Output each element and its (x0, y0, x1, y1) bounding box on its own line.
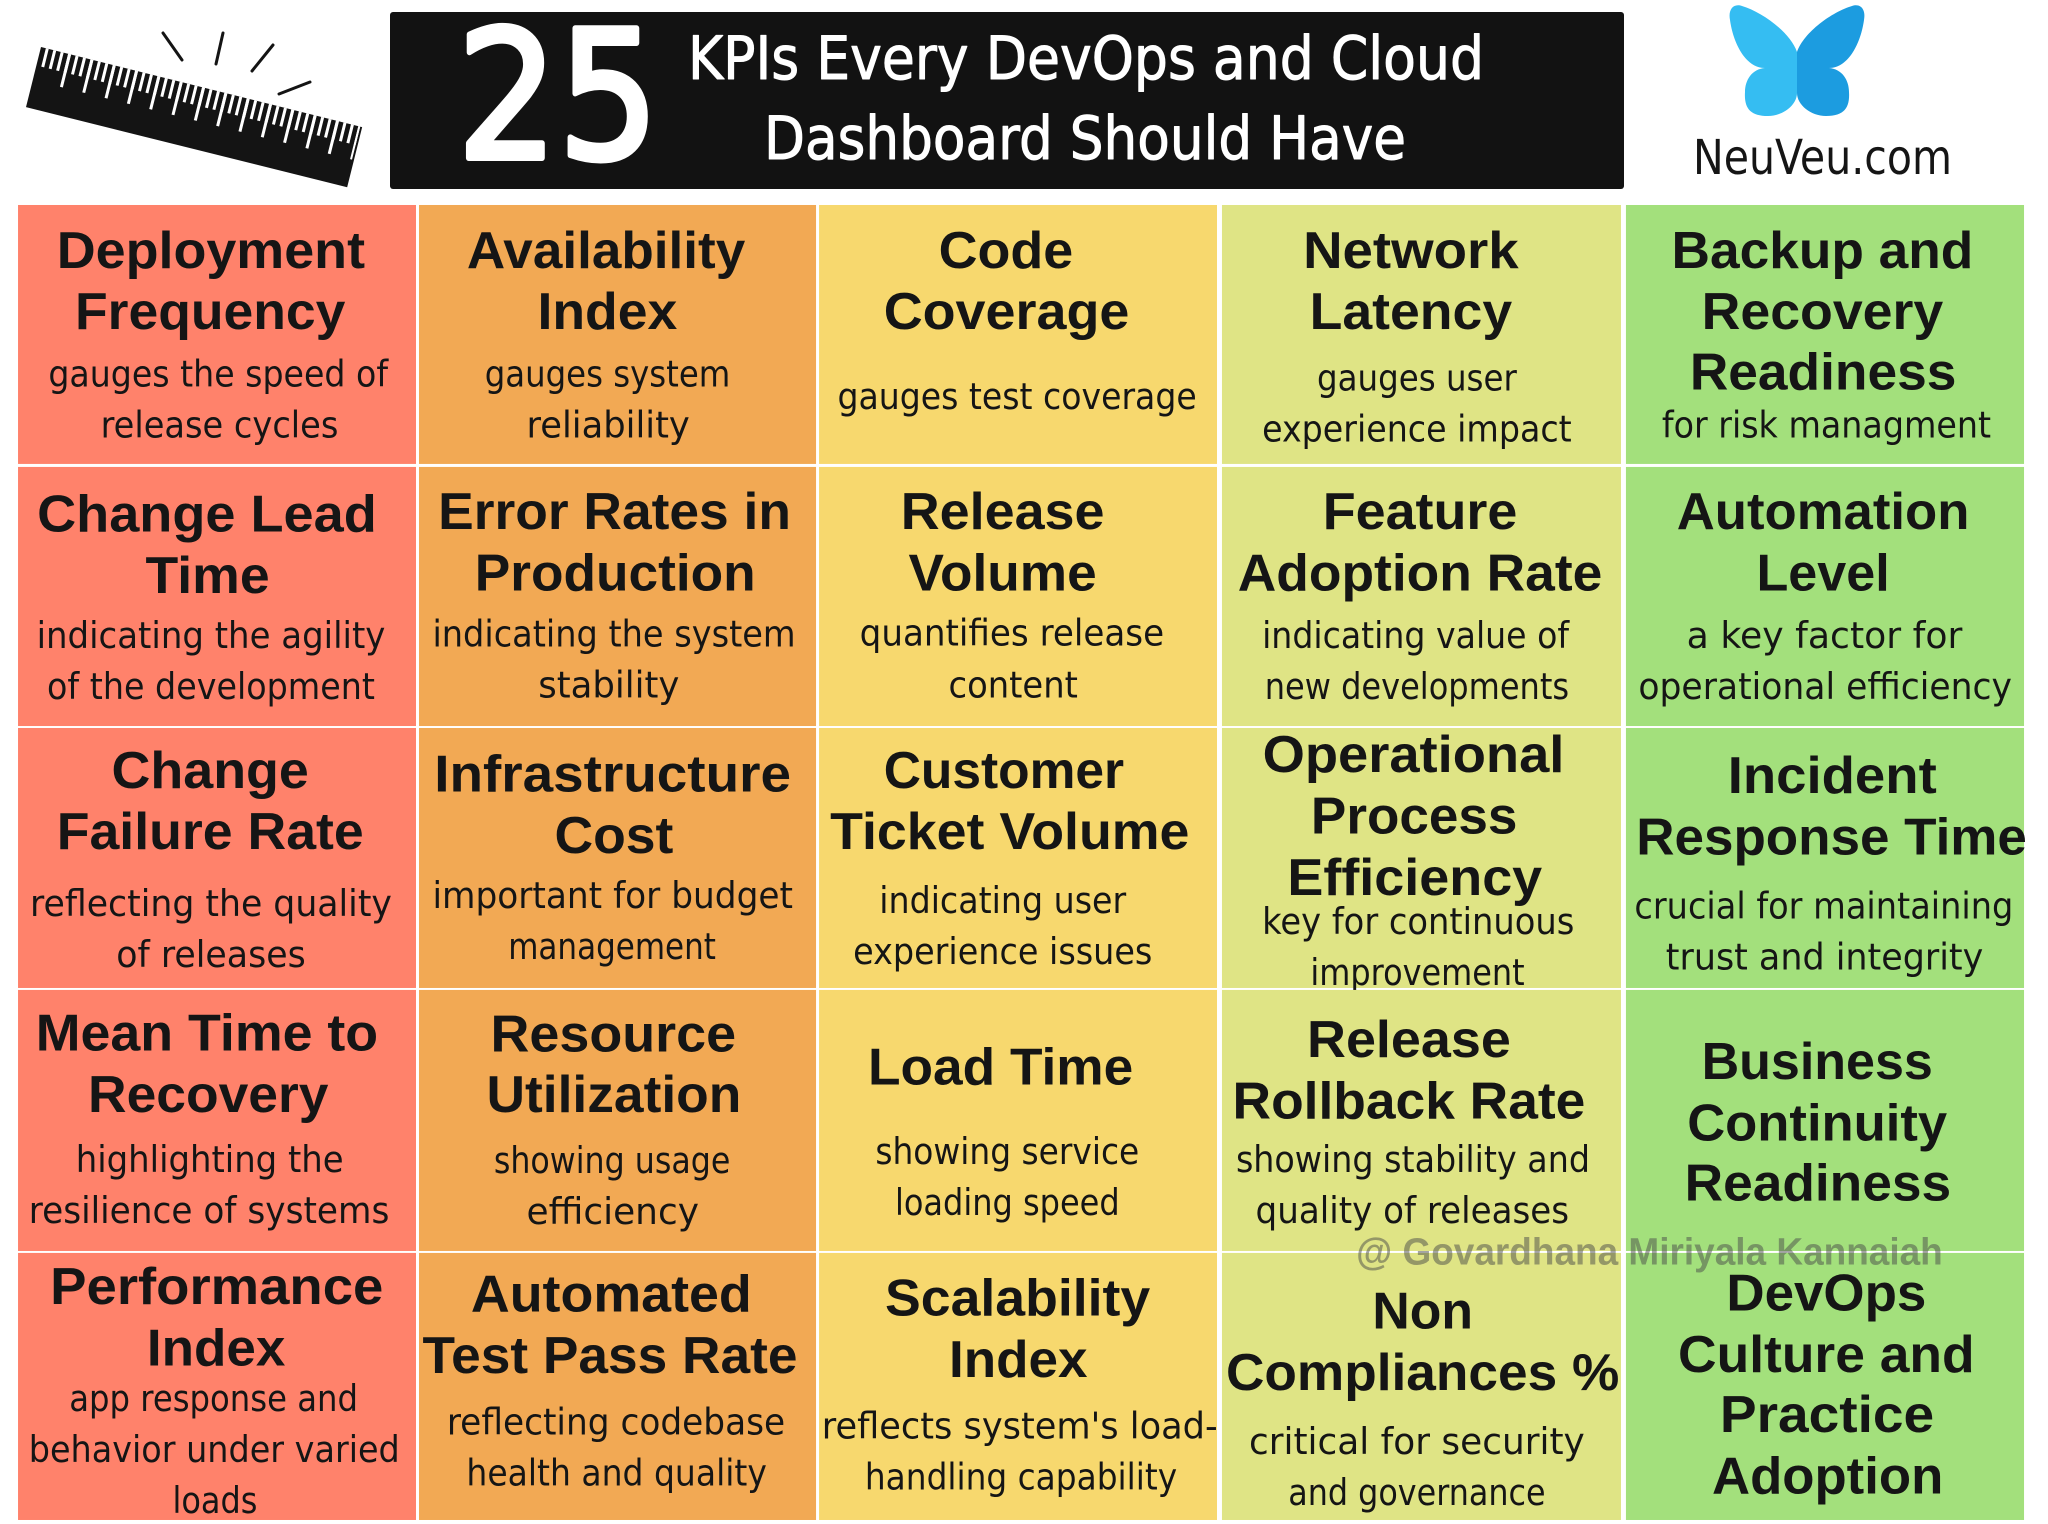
description: loads (172, 1479, 257, 1522)
description: trust and integrity (1666, 935, 1983, 978)
panel: Scalability Index (819, 1253, 1218, 1520)
description: app response and (69, 1377, 358, 1420)
description: indicating user (879, 879, 1127, 922)
heading: Automation (1677, 483, 1969, 541)
panel: Incident Response Time (1626, 728, 2027, 988)
heading (487, 1006, 741, 1124)
description: highlighting the (76, 1138, 344, 1181)
heading: Compliances % (1226, 1344, 1619, 1402)
panel: Change Lead Time (18, 467, 416, 726)
description: reflecting codebase (447, 1401, 785, 1444)
panel: Backup and Recovery Readiness (1626, 205, 2024, 464)
heading: Operational (1263, 726, 1564, 784)
panel: Automated Test Pass Rate (419, 1253, 816, 1520)
description: a key factor for (1687, 614, 1963, 657)
heading: Utilization (487, 1066, 741, 1124)
description: showing service (875, 1130, 1139, 1173)
description: operational efficiency (1638, 665, 2012, 708)
description (822, 1404, 1218, 1498)
heading: Rollback Rate (1233, 1072, 1585, 1130)
heading (434, 746, 791, 865)
panel: Non Compliances % (1222, 1253, 1621, 1520)
description (1638, 614, 2012, 708)
panel: Customer Ticket Volume (819, 728, 1217, 988)
description (432, 613, 796, 707)
description: management (508, 925, 716, 968)
description: experience issues (853, 930, 1152, 973)
panel: Business Continuity Readiness (1626, 990, 2024, 1251)
heading (901, 483, 1105, 603)
heading: Performance (50, 1258, 383, 1316)
heading (57, 742, 364, 861)
heading: Failure Rate (57, 803, 364, 861)
description: and governance (1288, 1471, 1546, 1514)
heading: Adoption (1712, 1447, 1943, 1505)
description: loading speed (895, 1181, 1120, 1224)
heading: Error Rates in (438, 483, 791, 541)
heading: Infrastructure (434, 746, 791, 804)
heading (423, 1266, 797, 1385)
description: important for budget (432, 874, 793, 917)
heading: Business (1702, 1033, 1933, 1091)
heading (36, 1004, 378, 1124)
heading: Customer (884, 742, 1124, 800)
panel: Automation Level (1626, 467, 2024, 726)
description (1236, 1138, 1590, 1232)
description: critical for security (1249, 1420, 1585, 1463)
heading: Deployment (57, 222, 365, 280)
description (853, 879, 1152, 973)
panel: Network Latency (1222, 205, 1621, 464)
description: gauges test coverage (837, 375, 1197, 418)
heading: Readiness (1690, 343, 1956, 401)
heading: Time (146, 547, 270, 605)
panel: Infrastructure Cost (419, 728, 816, 988)
heading: Process (1311, 788, 1517, 846)
description: indicating value of (1262, 614, 1570, 657)
heading: Efficiency (1287, 849, 1542, 907)
panel: Error Rates in Production (419, 467, 816, 726)
description: gauges the speed of (48, 353, 389, 396)
heading: Response Time (1636, 808, 2027, 866)
heading: Level (1756, 545, 1890, 603)
heading: Index (949, 1331, 1088, 1389)
heading: Culture and (1678, 1326, 1975, 1384)
heading: Recovery (88, 1066, 328, 1124)
description: quantifies release (860, 611, 1164, 654)
heading: Cost (554, 807, 673, 865)
heading: Change Lead (37, 486, 377, 544)
title line 2: Dashboard Should Have (764, 104, 1406, 174)
description: for risk managment (1662, 404, 1991, 447)
panel: Deployment Frequency (18, 205, 416, 464)
description (1262, 614, 1570, 708)
heading: Ticket Volume (830, 803, 1189, 861)
title line 1: KPIs Every DevOps and Cloud (688, 24, 1484, 94)
heading (1678, 1264, 1975, 1505)
description: reliability (527, 404, 690, 447)
heading: Index (537, 283, 677, 341)
panel: Load Time (819, 990, 1217, 1251)
panel: Mean Time to Recovery (18, 990, 416, 1251)
panel: DevOps Culture and Practice Adoption (1626, 1253, 2024, 1520)
heading (1233, 1011, 1585, 1130)
description: efficiency (527, 1190, 699, 1233)
description (1262, 900, 1574, 994)
panel: Change Failure Rate (18, 728, 416, 988)
description: experience impact (1262, 408, 1572, 451)
heading: Automated (471, 1266, 752, 1324)
heading (1303, 222, 1520, 341)
heading: Readiness (1685, 1155, 1951, 1213)
description (875, 1130, 1139, 1224)
heading: Resource (490, 1006, 736, 1064)
heading: Availability (467, 222, 745, 280)
description (860, 611, 1164, 707)
description: reflects system's load- (822, 1404, 1218, 1447)
description (37, 614, 385, 708)
description (1262, 357, 1572, 451)
heading: Release (901, 483, 1105, 541)
description: key for continuous (1262, 900, 1574, 943)
heading: Latency (1310, 283, 1512, 341)
heading: Volume (909, 545, 1097, 603)
description (29, 1377, 400, 1522)
heading: Backup and (1672, 222, 1973, 280)
description: showing usage (494, 1139, 730, 1182)
heading: Mean Time to (36, 1004, 378, 1062)
heading (438, 483, 791, 603)
heading: Incident (1728, 747, 1937, 805)
description: behavior under varied (29, 1428, 400, 1471)
heading (885, 1270, 1150, 1389)
heading: Practice (1720, 1386, 1934, 1444)
description: crucial for maintaining (1634, 884, 2013, 927)
description: showing stability and (1236, 1138, 1590, 1181)
description: health and quality (466, 1451, 767, 1494)
heading (467, 222, 745, 341)
heading: Non (1372, 1283, 1473, 1341)
watermark: @ Govardhana Miriyala Kannaiah (1356, 1232, 1943, 1274)
description (485, 353, 730, 447)
description: handling capability (865, 1455, 1177, 1498)
description: resilience of systems (29, 1189, 389, 1232)
heading (1672, 222, 1973, 401)
description: release cycles (101, 404, 338, 447)
panel: Availability Index (419, 205, 816, 464)
heading: Scalability (885, 1270, 1150, 1328)
description (432, 874, 793, 968)
heading: Index (147, 1319, 285, 1377)
description (30, 882, 392, 976)
description (1249, 1420, 1585, 1514)
description (494, 1139, 730, 1233)
logo text: NeuVeu.com (1693, 130, 1952, 186)
description: reflecting the quality (30, 882, 392, 925)
heading (1226, 1283, 1619, 1402)
heading: Code (939, 222, 1073, 280)
heading: Recovery (1702, 283, 1943, 341)
heading: Test Pass Rate (423, 1327, 797, 1385)
heading (830, 742, 1189, 861)
panel: Operational Process Efficiency (1222, 726, 1621, 994)
description: indicating the system (432, 613, 796, 656)
heading: Frequency (75, 283, 345, 341)
panel: Code Coverage (819, 205, 1217, 464)
heading (37, 486, 377, 605)
description: stability (538, 664, 679, 707)
panel: Release Volume (819, 467, 1217, 726)
heading: DevOps (1726, 1264, 1926, 1322)
description: gauges system (485, 353, 730, 396)
heading: Load Time (868, 1038, 1133, 1096)
description: of the development (47, 665, 375, 708)
heading: Production (475, 545, 756, 603)
description: new developments (1265, 665, 1569, 708)
heading: Release (1307, 1011, 1511, 1069)
heading (50, 1258, 383, 1377)
heading (884, 222, 1129, 341)
title banner (390, 0, 1624, 200)
heading: Network (1303, 222, 1520, 280)
description: indicating the agility (37, 614, 385, 657)
heading (1685, 1033, 1951, 1213)
heading (57, 222, 365, 341)
description: quality of releases (1256, 1189, 1569, 1232)
description (48, 353, 389, 447)
description: of releases (116, 933, 306, 976)
description (1634, 884, 2013, 978)
description (447, 1401, 785, 1494)
logo: NeuVeu butterfly (1693, 5, 1952, 186)
icon: butterfly (1730, 5, 1864, 116)
heading: Continuity (1687, 1095, 1947, 1153)
heading (1263, 726, 1564, 907)
heading (1636, 747, 2027, 866)
description: gauges user (1317, 357, 1518, 400)
heading (1677, 483, 1969, 603)
heading: Adoption Rate (1238, 545, 1602, 603)
panel: Resource Utilization (419, 990, 816, 1251)
description: improvement (1310, 951, 1525, 994)
heading: Feature (1323, 483, 1517, 541)
icon: ruler (26, 33, 362, 187)
description (29, 1138, 389, 1232)
heading: Coverage (884, 283, 1129, 341)
panel: Feature Adoption Rate (1222, 467, 1621, 726)
description: content (949, 664, 1078, 707)
heading: Change (112, 742, 309, 800)
panel: Performance Index (18, 1253, 416, 1522)
heading (1238, 483, 1602, 603)
panel: Release Rollback Rate (1222, 990, 1621, 1251)
